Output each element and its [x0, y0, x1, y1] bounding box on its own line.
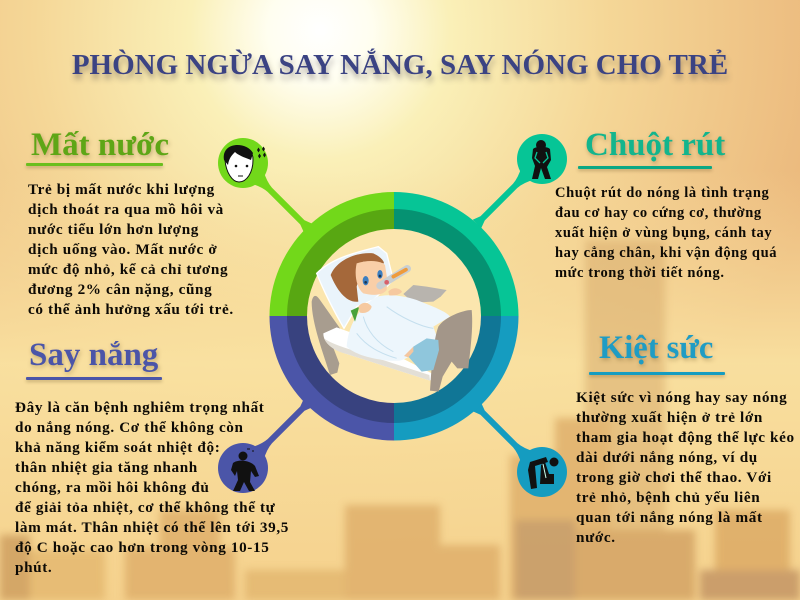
title: PHÒNG NGỪA SAY NẮNG, SAY NÓNG CHO TRẺ	[72, 49, 728, 81]
body text: làm mát. Thân nhiệt có thể lên tới 39,5	[15, 519, 289, 536]
body text: nước.	[576, 529, 616, 546]
body text: đương 2% cân nặng, cũng	[28, 281, 212, 298]
illustration: sick child in bed	[312, 247, 472, 392]
body text: phút.	[15, 559, 52, 576]
icon: figure bent over	[517, 447, 567, 497]
heading underline	[26, 163, 163, 166]
body text	[15, 399, 289, 576]
body text: mức trong thời tiết nóng.	[555, 265, 725, 281]
body text: Chuột rút do nóng là tình trạng	[555, 185, 769, 201]
body text: quan tới nắng nóng là mất	[576, 509, 763, 526]
heading: Kiệt sức: Kiệt sức	[599, 330, 713, 366]
body text: dài dưới nắng nóng, ví dụ	[576, 449, 758, 466]
body text: trẻ nhỏ, bệnh chủ yếu liên	[576, 489, 760, 506]
body text	[576, 389, 795, 546]
body text: xuất hiện ở vùng bụng, cánh tay	[555, 225, 772, 241]
body text: độ C hoặc cao hơn trong vòng 10-15	[15, 539, 269, 556]
body text: dịch thoát ra qua mồ hôi và	[28, 201, 224, 218]
body text: trong giờ chơi thể thao. Với	[576, 469, 772, 486]
panel: Say nắng	[15, 337, 289, 576]
body text: Đây là căn bệnh nghiêm trọng nhất	[15, 399, 264, 416]
body text	[555, 185, 777, 281]
body text: thường xuất hiện ở trẻ lớn	[576, 409, 763, 426]
body text: dịch uống vào. Mất nước ở	[28, 241, 217, 258]
ring	[270, 192, 518, 440]
icon: figure with heat stroke	[218, 443, 268, 493]
body text: đau cơ hay co cứng cơ, thường	[555, 205, 762, 221]
body text: hay cẳng chân, khi vận động quá	[555, 245, 777, 261]
body text: khả năng kiểm soát nhiệt độ:	[15, 439, 220, 456]
body text: mức độ nhỏ, kể cả chỉ tương	[28, 261, 228, 278]
body text: Trẻ bị mất nước khi lượng	[28, 181, 215, 198]
body text: để giải tỏa nhiệt, cơ thể không thể tự	[15, 499, 275, 516]
heading: Mất nước: Mất nước	[31, 127, 169, 163]
body text: chóng, ra mồi hôi không đủ	[15, 479, 209, 496]
heading underline	[589, 372, 725, 375]
panel: Chuột rút	[555, 127, 777, 281]
connector: teal	[471, 167, 534, 230]
body text: tham gia hoạt động thể lực kéo	[576, 429, 795, 446]
body text	[28, 181, 234, 318]
body text: có thể ảnh hưởng xấu tới trẻ.	[28, 301, 234, 318]
heading: Chuột rút: Chuột rút	[585, 127, 725, 163]
icon: face (dehydration)	[218, 138, 268, 188]
connector: green	[251, 171, 314, 234]
connector: blue	[471, 401, 534, 464]
icon: figure with cramp	[517, 134, 567, 184]
heading underline	[578, 166, 712, 169]
body text: thân nhiệt gia tăng nhanh	[15, 459, 198, 476]
body text: do nắng nóng. Cơ thể không còn	[15, 419, 244, 436]
panel: Kiệt sức	[576, 330, 795, 546]
body text: nước tiểu lớn hơn lượng	[28, 221, 199, 238]
heading underline	[26, 377, 162, 380]
body text: Kiệt sức vì nóng hay say nóng	[576, 389, 787, 406]
heading: Say nắng: Say nắng	[29, 337, 158, 373]
connector: indigo	[251, 397, 314, 460]
panel: Mất nước	[25, 127, 234, 318]
